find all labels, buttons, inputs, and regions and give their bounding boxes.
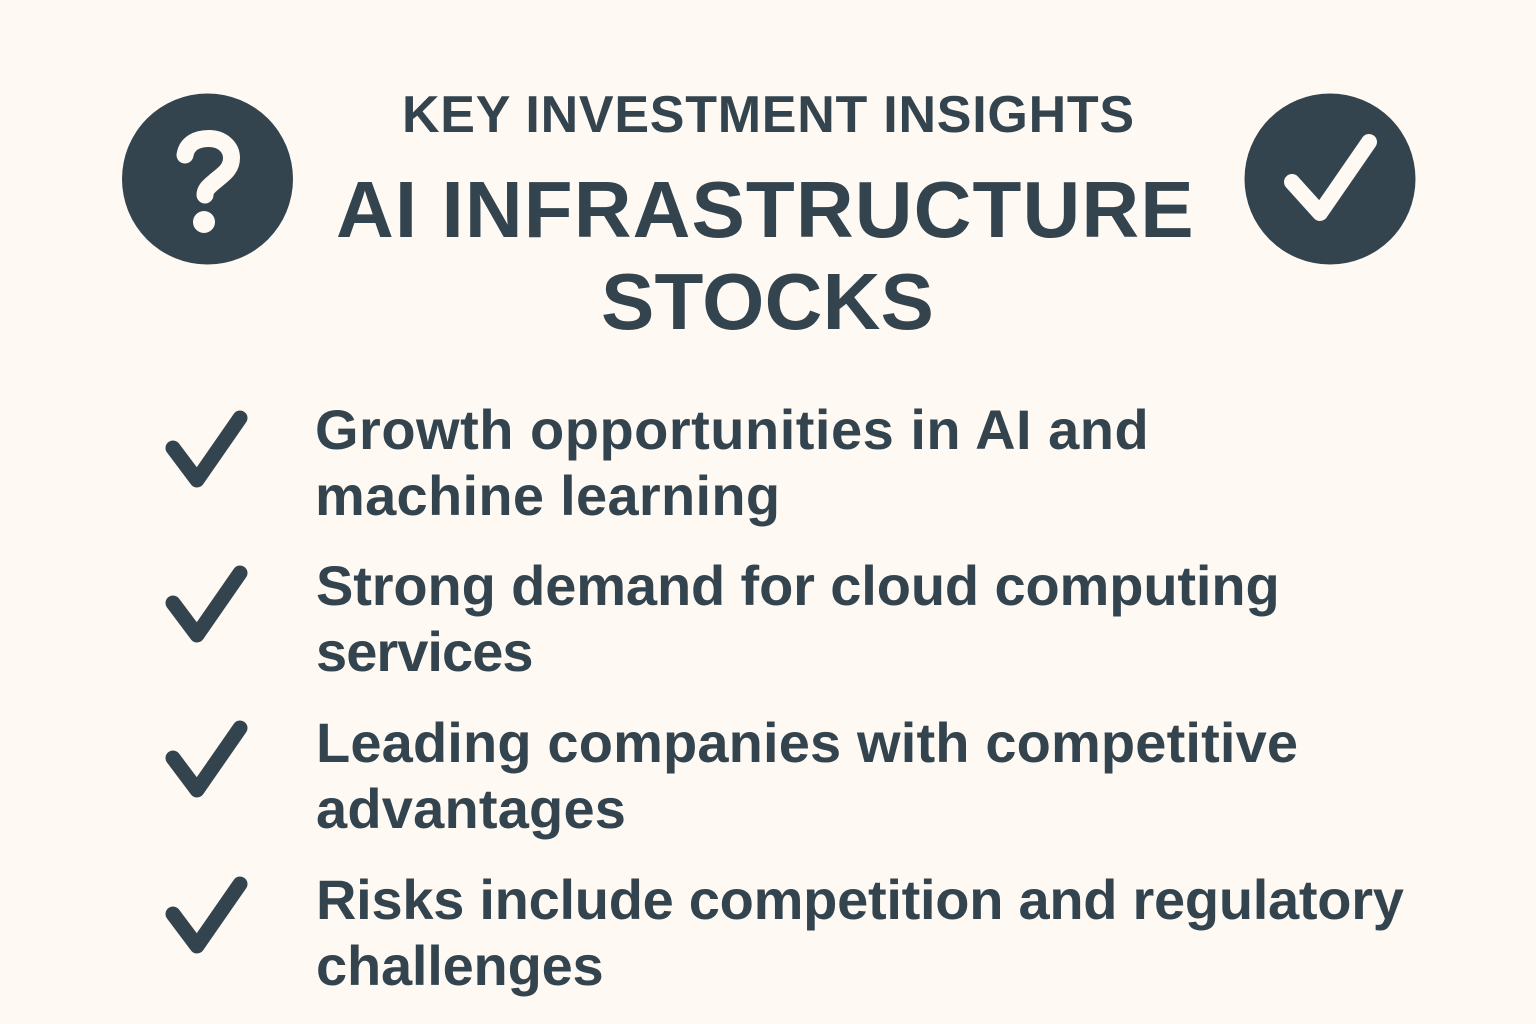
text: growth opportunities bbox=[315, 398, 1149, 527]
text: risks bbox=[316, 868, 1404, 997]
icon: check 4 bbox=[166, 876, 248, 954]
text: strong demand: services bbox=[316, 620, 533, 683]
text: leading companies: advantages bbox=[316, 777, 626, 840]
text: risks: Risks include competition and regulatory bbox=[316, 868, 1404, 931]
icon: question mark circle bbox=[122, 94, 293, 264]
icon: check 1 bbox=[166, 410, 248, 488]
text: risks: challenges bbox=[316, 934, 603, 997]
text: leading companies bbox=[316, 711, 1298, 840]
icon: check mark circle bbox=[1244, 94, 1416, 264]
text: strong demand: Strong demand for cloud computing bbox=[316, 554, 1280, 617]
title: AI infrastructure stocks: STOCKS bbox=[601, 257, 934, 346]
icon: check 3 bbox=[166, 720, 248, 798]
text: growth opportunities: machine learning bbox=[315, 464, 780, 527]
text: strong demand bbox=[316, 554, 1280, 683]
icon: check 2 bbox=[166, 566, 248, 642]
text: growth opportunities: Growth opportunities in AI and bbox=[315, 398, 1149, 461]
title: AI infrastructure stocks bbox=[336, 165, 1195, 346]
text: leading companies: Leading companies with competitive bbox=[316, 711, 1298, 774]
title: AI infrastructure stocks: AI INFRASTRUCTURE bbox=[336, 165, 1195, 254]
heading: key investment insights: KEY INVESTMENT INSIGHTS bbox=[402, 86, 1135, 144]
